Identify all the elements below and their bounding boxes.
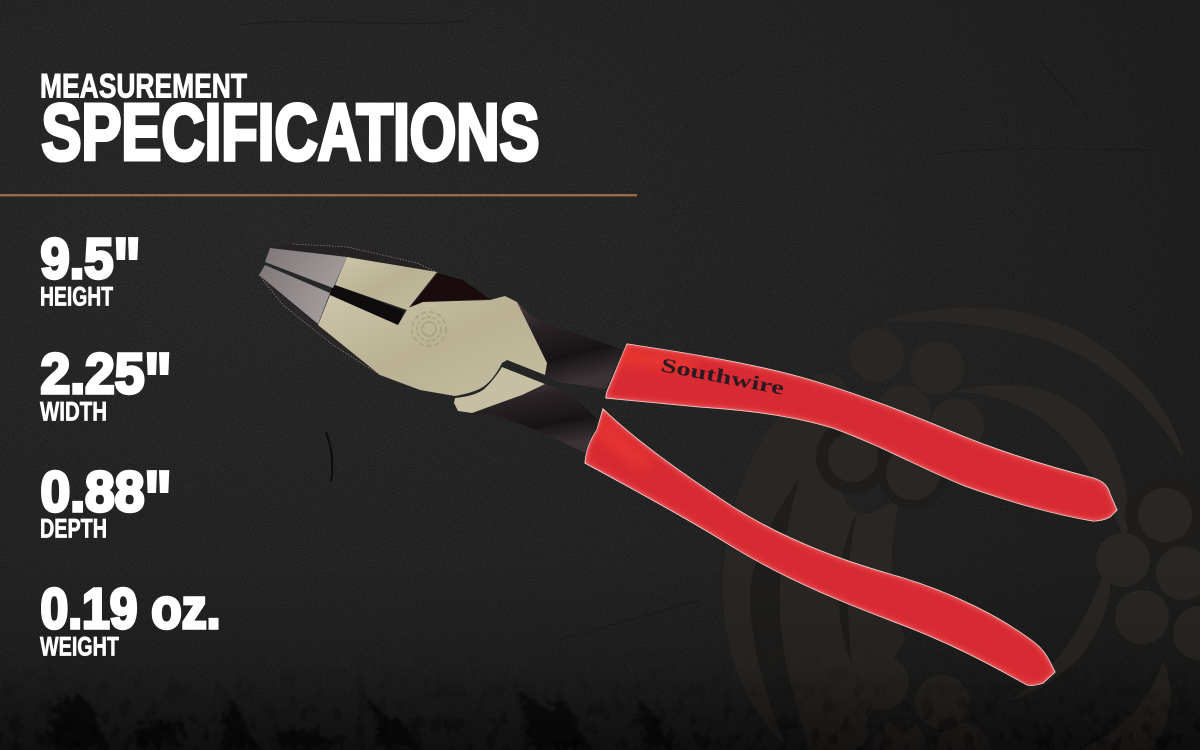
brand name on grip: Southwire: [659, 354, 786, 400]
watermark: upper circle cluster: [803, 328, 984, 509]
pliers: pivot emblem: [412, 312, 446, 346]
pliers: lower red grip: [585, 409, 1055, 685]
pliers: main head plate: [318, 295, 547, 396]
title line: measurement: MEASUREMENT: [40, 68, 247, 106]
bottom grunge: [0, 670, 1200, 750]
pliers: handle necks: [472, 302, 623, 453]
watermark: dark spikes: [750, 477, 857, 750]
pliers: [259, 244, 1117, 685]
pliers: dark back edges of jaws: [259, 244, 490, 375]
title line: specifications: SPECIFICATIONS: [42, 88, 540, 176]
spec: height: [40, 222, 141, 312]
watermark: crescents: [723, 307, 1184, 750]
spec: width: [40, 336, 172, 426]
pliers: upper red grip: [606, 344, 1117, 521]
pliers: gripping faces: [259, 248, 347, 324]
divider rule: [0, 194, 637, 196]
spec: weight: WEIGHT: [40, 632, 119, 662]
title: [40, 68, 540, 176]
spec: width: WIDTH: [40, 396, 107, 426]
pliers: upper jaw plate: [335, 257, 437, 310]
pliers: slot between jaws: [330, 284, 404, 326]
brand logo watermark: [723, 307, 1200, 750]
spec: width: ": [144, 336, 172, 426]
spec: depth: 0.88: [40, 460, 144, 524]
spec: height: HEIGHT: [40, 282, 113, 312]
watermark: right circle cluster: [1096, 475, 1200, 660]
spec: weight: 0.19 oz.: [40, 577, 220, 641]
pliers: lower tang plate: [454, 367, 545, 413]
spec: height: 9.5: [40, 227, 114, 291]
watermark: lower circle cluster: [815, 656, 990, 750]
spec: height: ": [113, 222, 141, 310]
spec: depth: ": [144, 454, 172, 544]
spec: weight: [40, 577, 220, 662]
spec: width: 2.25: [40, 342, 144, 406]
spec: depth: [40, 454, 172, 544]
spec: depth: DEPTH: [40, 514, 107, 544]
